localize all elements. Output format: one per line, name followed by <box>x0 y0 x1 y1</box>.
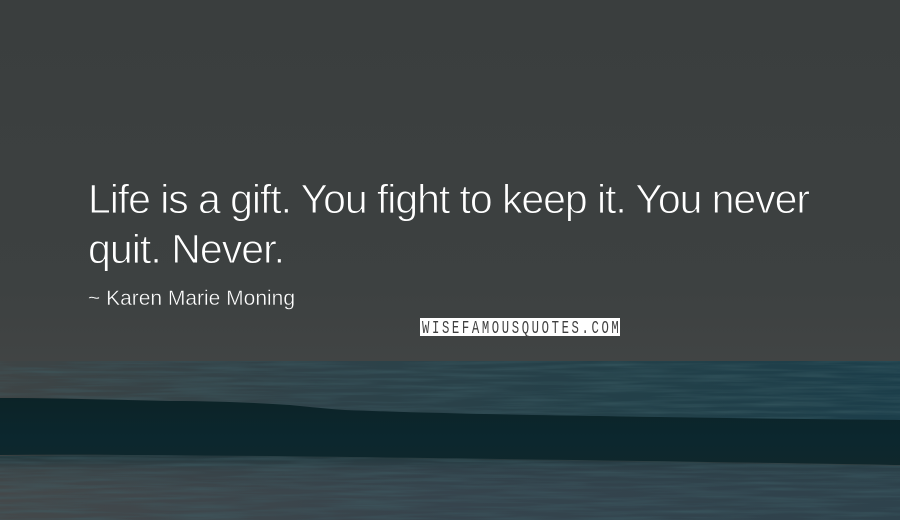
watermark badge: WISEFAMOUSQUOTES.COM <box>422 318 621 339</box>
background: dusk sky <box>0 0 900 362</box>
quote text <box>88 176 810 272</box>
attribution: ~ Karen Marie Moning <box>88 287 295 310</box>
background: ocean scene <box>0 361 900 520</box>
quote line 2: quit. Never. <box>88 226 285 272</box>
quote line 1: Life is a gift. You fight to keep it. You never <box>88 176 810 222</box>
